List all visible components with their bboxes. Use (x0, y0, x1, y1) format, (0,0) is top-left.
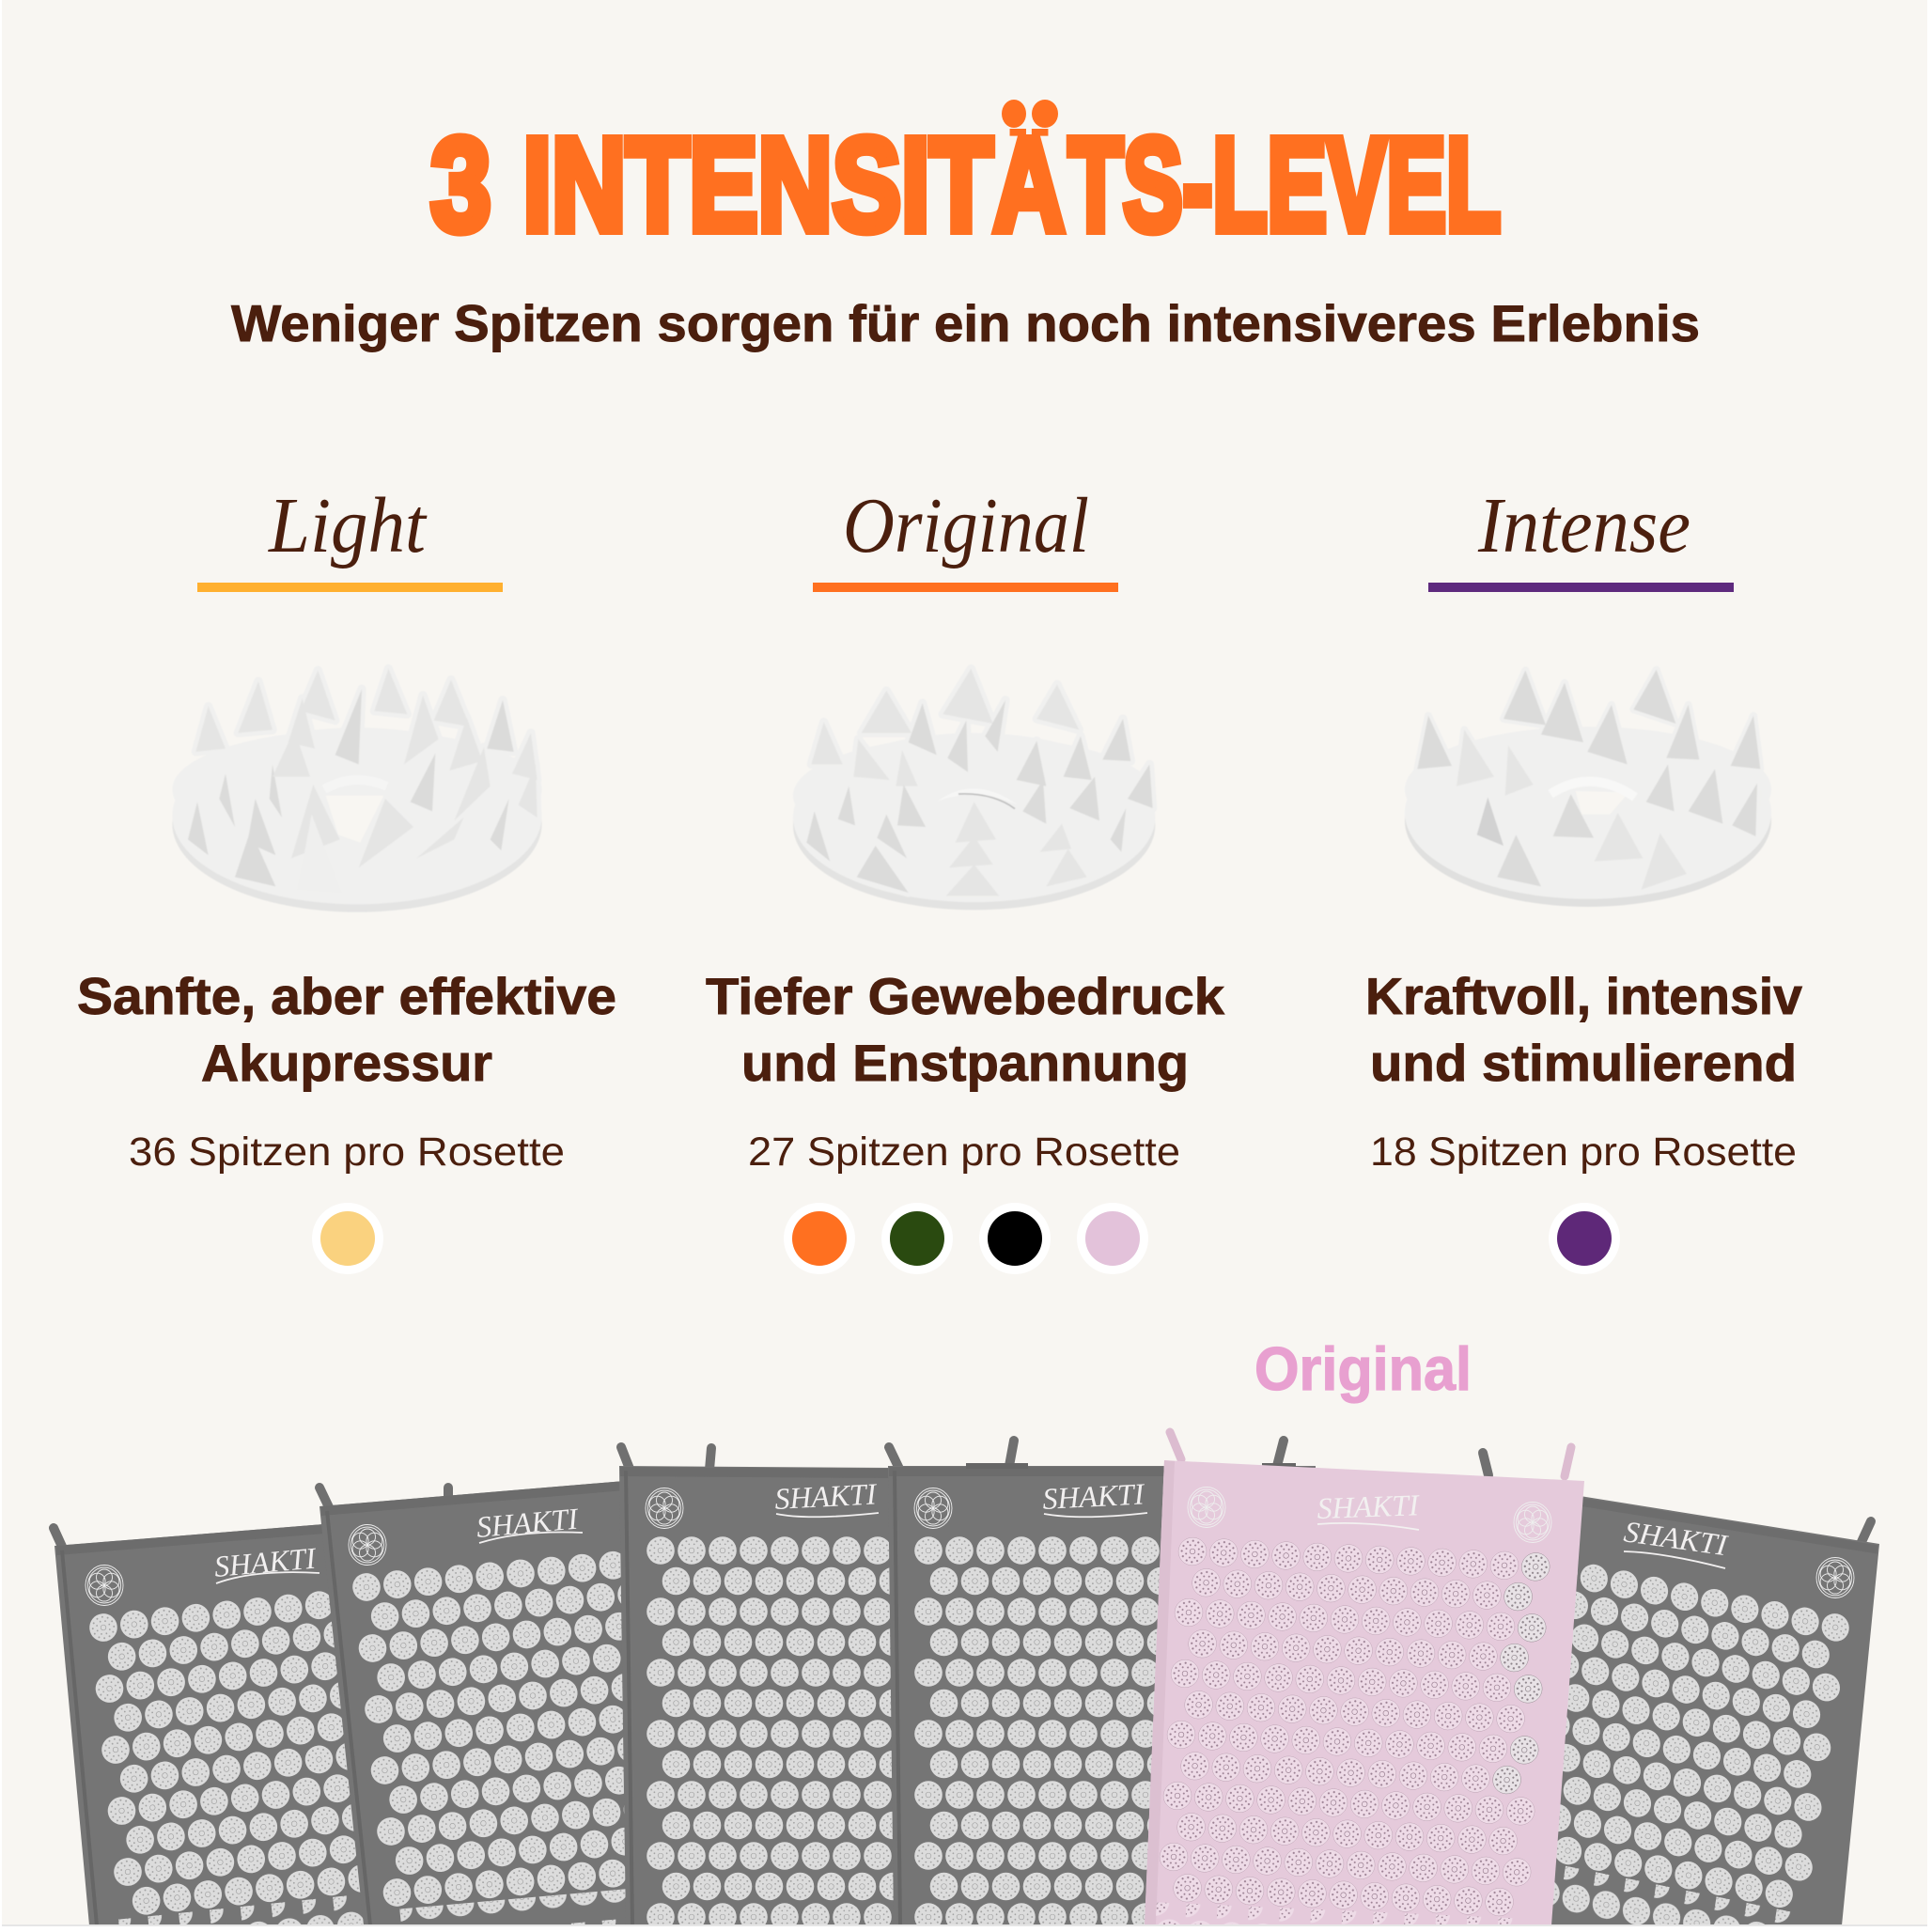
mat 3: grey: SHAKTI (773, 1476, 879, 1516)
colour swatch: yellow (312, 1203, 383, 1274)
heading: Intense: und stimulierend (1370, 1035, 1797, 1092)
underline: Intense (1428, 583, 1734, 592)
spike count: Light: 36 Spitzen pro Rosette (129, 1130, 565, 1175)
label: pink mat: Original (1254, 1334, 1472, 1403)
underline: Light (197, 583, 503, 592)
label: Original: Original (843, 482, 1089, 569)
label: Intense: Intense (1477, 482, 1690, 569)
spike count: Intense: 18 Spitzen pro Rosette (1370, 1130, 1797, 1175)
mat 3: grey (619, 1447, 1016, 1931)
heading: Light: Sanfte, aber effektive (77, 968, 616, 1025)
heading: Intense (1365, 968, 1803, 1092)
mat 6: grey, right (1428, 1484, 1879, 1932)
heading: Original: und Enstpannung (741, 1035, 1189, 1092)
heading: Intense: Kraftvoll, intensiv (1365, 968, 1803, 1025)
heading: Original (706, 968, 1225, 1092)
column: Light (77, 482, 616, 1274)
column: Intense (1365, 482, 1803, 1274)
mat 5: pink, front: SHAKTI (1317, 1488, 1421, 1525)
label: Light: Light (268, 482, 428, 569)
title (430, 90, 1501, 258)
icon: original rosette, 27 spikes (793, 669, 1155, 910)
title: 3 (430, 110, 491, 258)
heading: Light: Akupressur (201, 1035, 492, 1092)
subtitle: Weniger Spitzen sorgen für ein noch intensiveres Erlebnis (231, 294, 1700, 352)
colour swatch: purple (1549, 1203, 1620, 1274)
heading: Light (77, 968, 616, 1092)
heading: Original: Tiefer Gewebedruck (706, 968, 1225, 1025)
title: Ä (993, 110, 1065, 258)
mat 1: grey: SHAKTI (212, 1541, 319, 1583)
icon: intense rosette, 18 spikes (1405, 670, 1771, 907)
spike count: Original: 27 Spitzen pro Rosette (748, 1130, 1180, 1175)
underline: Original (813, 583, 1118, 592)
mat 2: grey (319, 1481, 758, 1932)
mat 4: grey: SHAKTI (1041, 1476, 1146, 1516)
colour swatches: orange, green, black, pink (784, 1203, 1148, 1274)
title: INTENSIT (522, 110, 992, 258)
mat 4: grey (888, 1441, 1488, 1931)
mat 2: grey: SHAKTI (475, 1502, 581, 1544)
column: Original (706, 482, 1225, 1274)
icon: light rosette, 36 spikes (172, 669, 542, 912)
mat 6: grey, right: SHAKTI (1622, 1514, 1730, 1562)
mat 5: pink, front (1145, 1432, 1584, 1932)
mat 1: grey (54, 1524, 491, 1932)
title: TS-LEVEL (1068, 110, 1501, 258)
